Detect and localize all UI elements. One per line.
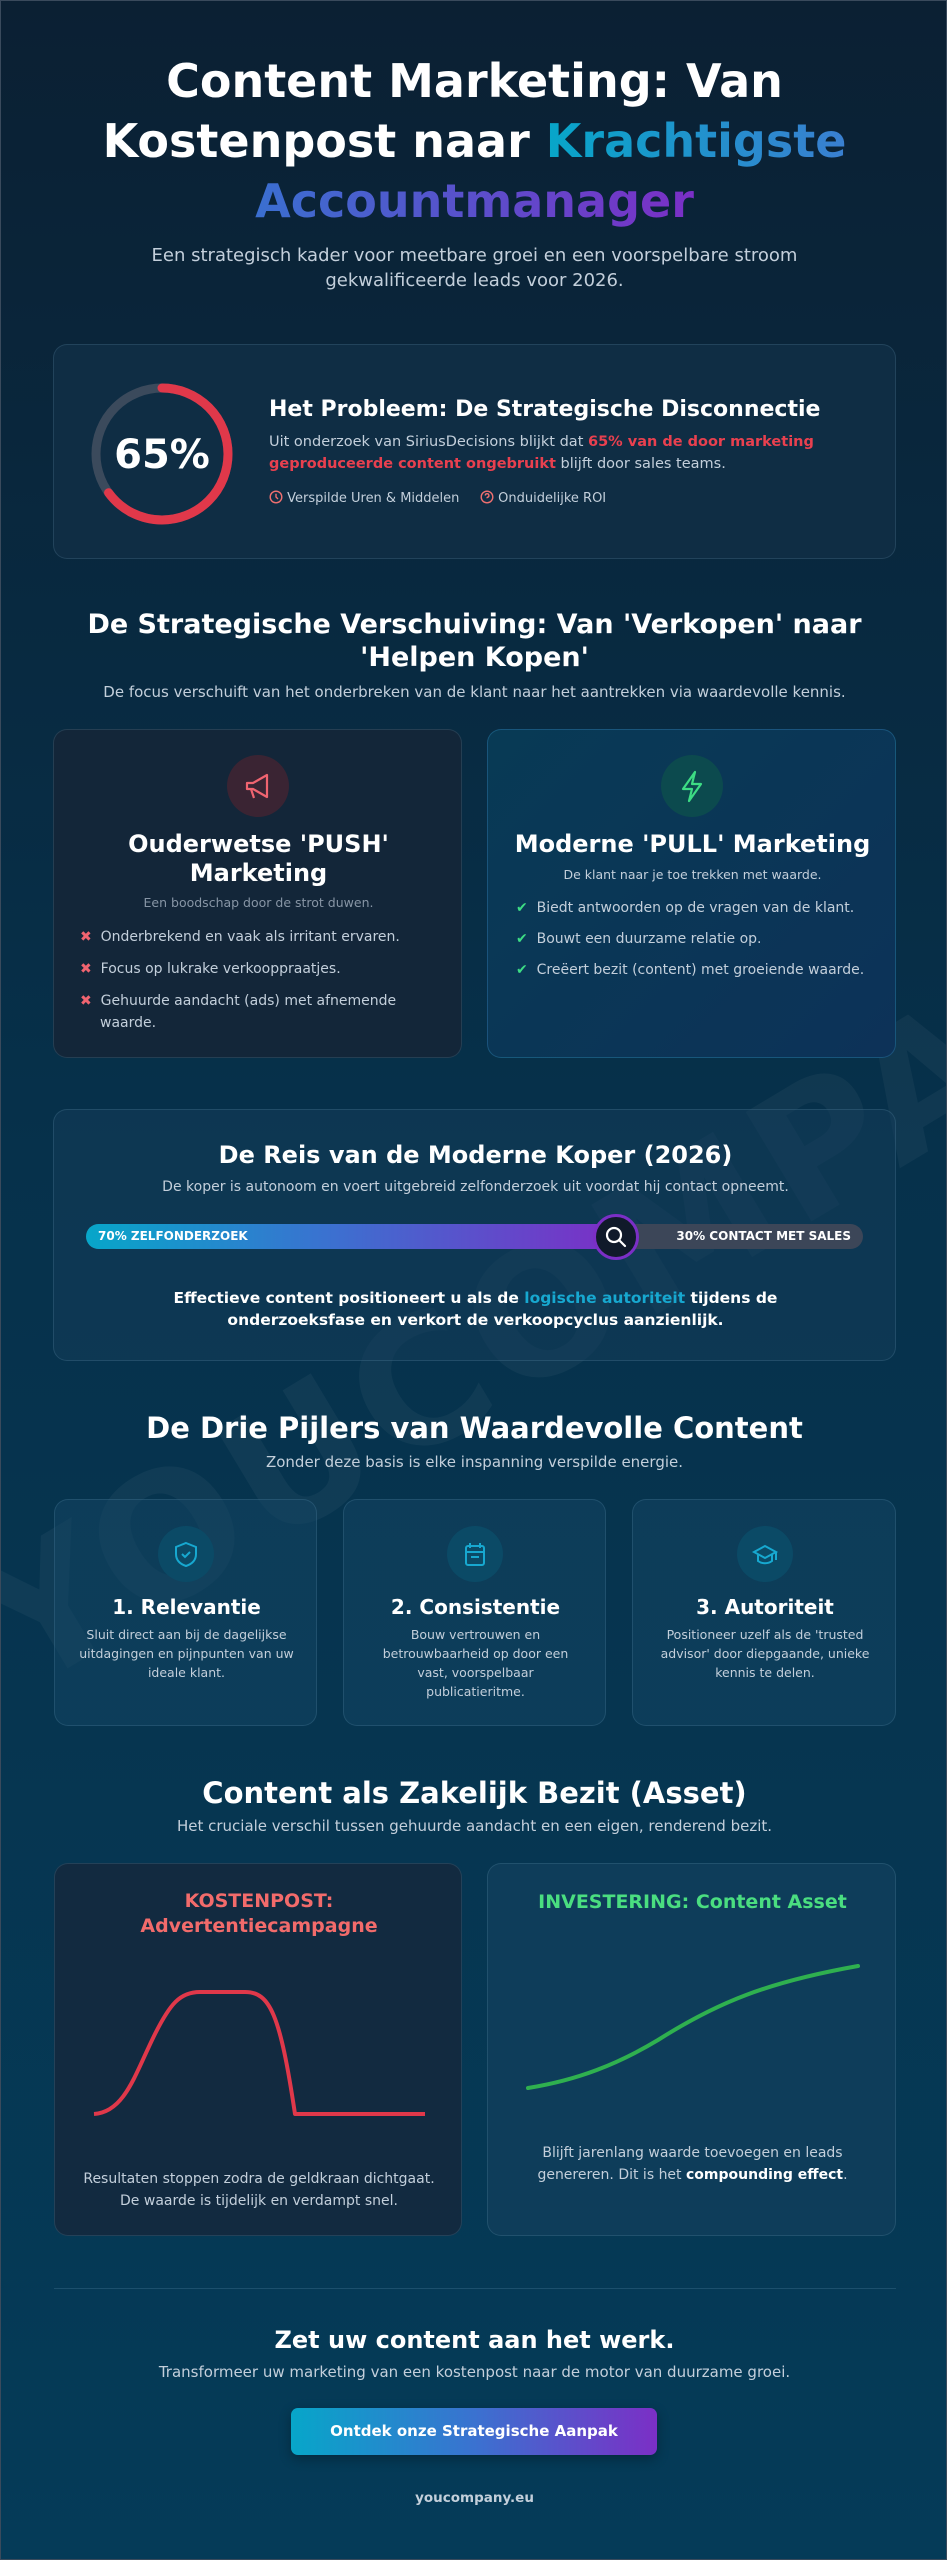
heading: consistentie: 2. Consistentie: [391, 1595, 560, 1619]
list: push: ✖ Onderbrekend en vaak als irritant ervaren.: [80, 929, 400, 945]
text: problem: Uit onderzoek van SiriusDecisions blijkt dat 65% van de door marketing geproduceerde content ongebruikt blijft door sales teams.: [269, 434, 814, 472]
list: pull: [516, 900, 864, 978]
panel: push: [53, 729, 462, 1058]
text: investment: [537, 2145, 848, 2183]
list: pull: ✔ Biedt antwoorden op de vragen van de klant.: [516, 900, 854, 916]
subtitle: gekwalificeerde leads voor 2026.: [325, 270, 624, 291]
list: pull: ✔ Bouwt een duurzame relatie op.: [516, 931, 762, 947]
text: journey conclusion: [174, 1289, 777, 1329]
text: investment: Blijft jarenlang waarde toevoegen en leads: [542, 2145, 843, 2161]
panel: pull: [487, 729, 896, 1058]
title: Accountmanager: [255, 174, 694, 228]
icon: search knob: [593, 1214, 639, 1260]
sub: push: Een boodschap door de strot duwen.: [144, 895, 373, 910]
icons row: Verspilde Uren & Middelen Onduidelijke ROI: [287, 491, 606, 506]
text: autoriteit: Positioneer uzelf als de 'trusted advisor' door diepgaande, unieke kennis te delen.: [661, 1627, 869, 1680]
heading: pillars: De Drie Pijlers van Waardevolle Content: [146, 1411, 803, 1445]
button: CTA: Ontdek onze Strategische Aanpak: [330, 2422, 618, 2440]
list: push: ✖ Gehuurde aandacht (ads) met afnemende waarde.: [80, 993, 396, 1031]
panel: cost: [54, 1863, 462, 2236]
heading: autoriteit: 3. Autoriteit: [696, 1595, 834, 1619]
heading: kostenpost: KOSTENPOST:: [185, 1890, 333, 1912]
text: consistentie: Bouw vertrouwen en betrouwbaarheid op door een vast, voorspelbaar publicatieritme.: [383, 1627, 568, 1699]
text: journey conclusion: Effectieve content positioneert u als de logische autoriteit tijdens de: [174, 1289, 777, 1307]
list: push: [80, 929, 400, 1031]
heading: investering: INVESTERING: Content Asset: [538, 1891, 847, 1913]
bar chart: 70/30: 30% CONTACT MET SALES: [676, 1229, 851, 1243]
heading: push: [128, 830, 389, 887]
icon: calendar: [447, 1526, 503, 1582]
icon: megaphone: [227, 755, 289, 817]
button: CTA: [291, 2408, 657, 2455]
text: relevantie: Sluit direct aan bij de dagelijkse uitdagingen en pijnpunten van uw ideale klant.: [79, 1627, 294, 1680]
panel: buyer journey: [53, 1109, 896, 1361]
icon: lightning: [661, 755, 723, 817]
heading: push: Marketing: [190, 859, 327, 887]
list: push: ✖ Focus op lukrake verkooppraatjes.: [80, 961, 341, 977]
list: pull: ✔ Creëert bezit (content) met groeiende waarde.: [516, 962, 864, 978]
subtitle: Een strategisch kader voor meetbare groei en een voorspelbare stroom: [152, 245, 797, 266]
bar chart: 70/30: 70% ZELFONDERZOEK: [98, 1229, 248, 1243]
text: cost: Resultaten stoppen zodra de geldkraan dichtgaat.: [83, 2171, 435, 2187]
bar chart: 70/30: [86, 1224, 863, 1249]
subheading: shift: De focus verschuift van het onderbreken van de klant naar het aantrekken via waardevolle kennis.: [103, 683, 846, 701]
icon: graduation cap: [737, 1526, 793, 1582]
text: CTA: Transformeer uw marketing van een kostenpost naar de motor van duurzame groei.: [159, 2363, 790, 2381]
chart: declining campaign curve: [94, 1990, 425, 2116]
heading: shift: De Strategische Verschuiving: Van 'Verkopen' naar: [87, 609, 862, 640]
heading: shift: [87, 609, 862, 673]
subtitle: [152, 245, 797, 291]
title: [103, 54, 846, 228]
heading: kostenpost: [140, 1890, 378, 1937]
heading: relevantie: 1. Relevantie: [112, 1595, 261, 1619]
subheading: pillars: Zonder deze basis is elke inspanning verspilde energie.: [266, 1453, 683, 1471]
panel: pillar 3: [632, 1499, 896, 1726]
panel: problem: [53, 344, 896, 559]
text: journey conclusion: onderzoeksfase en verkort de verkoopcyclus aanzienlijk.: [227, 1311, 724, 1329]
text: cost: [83, 2171, 435, 2209]
heading: journey: De Reis van de Moderne Koper (2026): [219, 1141, 732, 1169]
heading: CTA: Zet uw content aan het werk.: [274, 2326, 674, 2354]
text: cost: De waarde is tijdelijk en verdampt snel.: [120, 2193, 398, 2209]
title: Kostenpost naar Krachtigste: [103, 114, 846, 168]
chart: 65% ring: 65%: [114, 432, 210, 478]
icon: shield: [158, 1526, 214, 1582]
text: investment: genereren. Dit is het compounding effect.: [537, 2167, 848, 2183]
subheading: asset: Het cruciale verschil tussen gehuurde aandacht en een eigen, renderend bezit.: [177, 1817, 772, 1835]
heading: push: Ouderwetse 'PUSH': [128, 830, 389, 858]
chart: 65% ring: [92, 384, 232, 524]
sub: pull: De klant naar je toe trekken met waarde.: [563, 867, 822, 882]
sub: journey: De koper is autonoom en voert uitgebreid zelfonderzoek uit voordat hij contact opneemt.: [162, 1179, 789, 1195]
heading: problem: Het Probleem: De Strategische Disconnectie: [269, 397, 820, 422]
panel: pillar 2: [343, 1499, 606, 1726]
heading: asset: Content als Zakelijk Bezit (Asset): [202, 1776, 747, 1810]
title: Content Marketing: Van: [166, 54, 783, 108]
heading: kostenpost: Advertentiecampagne: [140, 1915, 378, 1937]
heading: pull: Moderne 'PULL' Marketing: [515, 830, 870, 858]
panel: pillar 1: [54, 1499, 317, 1726]
chart: growth curve: [526, 1964, 860, 2090]
footer: youcompany.eu: [415, 2490, 534, 2506]
heading: shift: 'Helpen Kopen': [360, 642, 589, 673]
panel: investment: [487, 1863, 896, 2236]
